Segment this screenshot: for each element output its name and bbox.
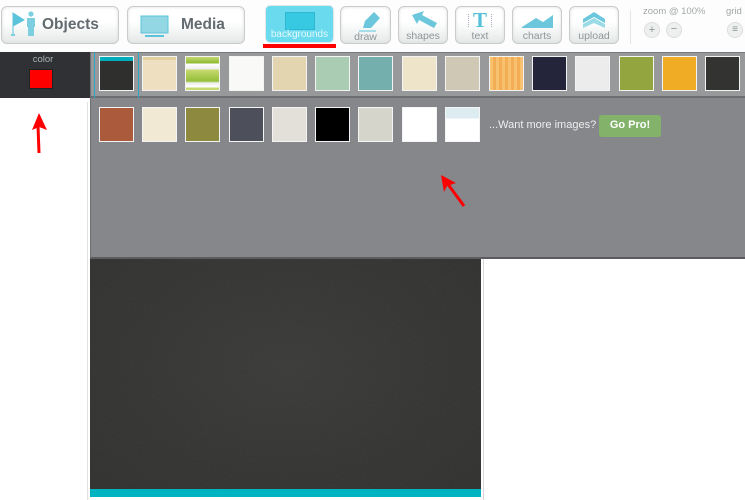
zoom control bbox=[643, 6, 706, 38]
swatch: teal bbox=[358, 56, 393, 91]
label: upload: upload bbox=[578, 30, 610, 42]
swatches row 2 bbox=[99, 107, 480, 142]
dotted guide left bbox=[468, 14, 469, 27]
swatch: wood bbox=[99, 107, 134, 142]
button: zoom out: − bbox=[671, 23, 677, 35]
button: Go Pro: Go Pro! bbox=[610, 119, 650, 131]
swatch: linen bbox=[445, 56, 480, 91]
button: grid bbox=[727, 22, 743, 38]
swatch: navy bbox=[532, 56, 567, 91]
swatch: orange plaid bbox=[489, 56, 524, 91]
swatch: notepaper bbox=[445, 107, 480, 142]
icon: background rectangle bbox=[285, 12, 315, 30]
background picker panel bbox=[90, 52, 745, 259]
icon: pencil bbox=[359, 12, 380, 32]
label: shapes: shapes bbox=[406, 30, 440, 42]
swatch: olive bbox=[185, 107, 220, 142]
swatch: stone bbox=[272, 107, 307, 142]
swatch: white bbox=[229, 56, 264, 91]
button: backgrounds (active) bbox=[265, 5, 334, 43]
button: Go Pro bbox=[599, 115, 661, 137]
red underline bbox=[263, 44, 336, 48]
swatch: parchment bbox=[402, 56, 437, 91]
button: charts bbox=[512, 6, 562, 44]
label: charts: charts bbox=[523, 30, 551, 42]
button: draw bbox=[340, 6, 391, 44]
label: draw: draw bbox=[354, 31, 377, 43]
toolbar divider bbox=[630, 10, 631, 44]
swatch: black bbox=[315, 107, 350, 142]
button: grid: ≡ bbox=[732, 24, 738, 35]
label: Objects: Objects bbox=[42, 16, 99, 33]
swatch: light grey bbox=[575, 56, 610, 91]
upsell text: ...Want more images? bbox=[489, 119, 596, 131]
top toolbar bbox=[0, 0, 745, 52]
button: shapes bbox=[398, 6, 448, 44]
button: text bbox=[455, 6, 505, 44]
selection highlight bbox=[94, 52, 139, 98]
icon: letter T: T bbox=[473, 8, 487, 32]
button: zoom in: + bbox=[649, 24, 655, 36]
label: zoom percent: zoom @ 100% bbox=[643, 6, 705, 17]
icon: area chart bbox=[522, 15, 553, 28]
chalk texture bbox=[93, 262, 479, 488]
swatch: ivory bbox=[142, 107, 177, 142]
swatch: tan bbox=[272, 56, 307, 91]
teal footer strip bbox=[90, 489, 481, 497]
left color panel bbox=[0, 52, 91, 98]
label: backgrounds: backgrounds bbox=[271, 29, 328, 40]
icon: arrow shape bbox=[412, 11, 437, 28]
swatch: charcoal bbox=[705, 56, 740, 91]
label: grid: grid bbox=[726, 6, 742, 17]
swatch: amber bbox=[662, 56, 697, 91]
button: Media bbox=[127, 6, 245, 44]
icon: monitor bbox=[140, 16, 168, 37]
label: Media: Media bbox=[181, 16, 225, 33]
icon: flag and person bbox=[11, 11, 35, 36]
swatch: plain white bbox=[402, 107, 437, 142]
swatches row 1 bbox=[99, 56, 740, 91]
button: Objects bbox=[1, 6, 119, 44]
icon: upload chevrons bbox=[583, 12, 605, 28]
canvas left edge line bbox=[87, 102, 88, 500]
label: text: text bbox=[472, 30, 488, 42]
color swatch: red bbox=[29, 69, 53, 89]
swatch: pale grey bbox=[358, 107, 393, 142]
swatch: sage bbox=[315, 56, 350, 91]
canvas: chalkboard background bbox=[90, 259, 481, 497]
swatch: cream paper bbox=[142, 56, 177, 91]
button: zoom out bbox=[666, 22, 682, 38]
dotted guide right bbox=[491, 14, 492, 27]
grid control bbox=[726, 6, 743, 38]
swatch: green landscape bbox=[185, 56, 220, 91]
button: zoom in bbox=[644, 22, 660, 38]
canvas right edge line bbox=[483, 259, 484, 500]
swatch: slate bbox=[229, 107, 264, 142]
label: color: color bbox=[33, 54, 53, 65]
swatch: chalkboard teal bbox=[99, 56, 134, 91]
swatch row band bbox=[91, 52, 745, 98]
button: upload bbox=[569, 6, 619, 44]
swatch: olive green bbox=[619, 56, 654, 91]
